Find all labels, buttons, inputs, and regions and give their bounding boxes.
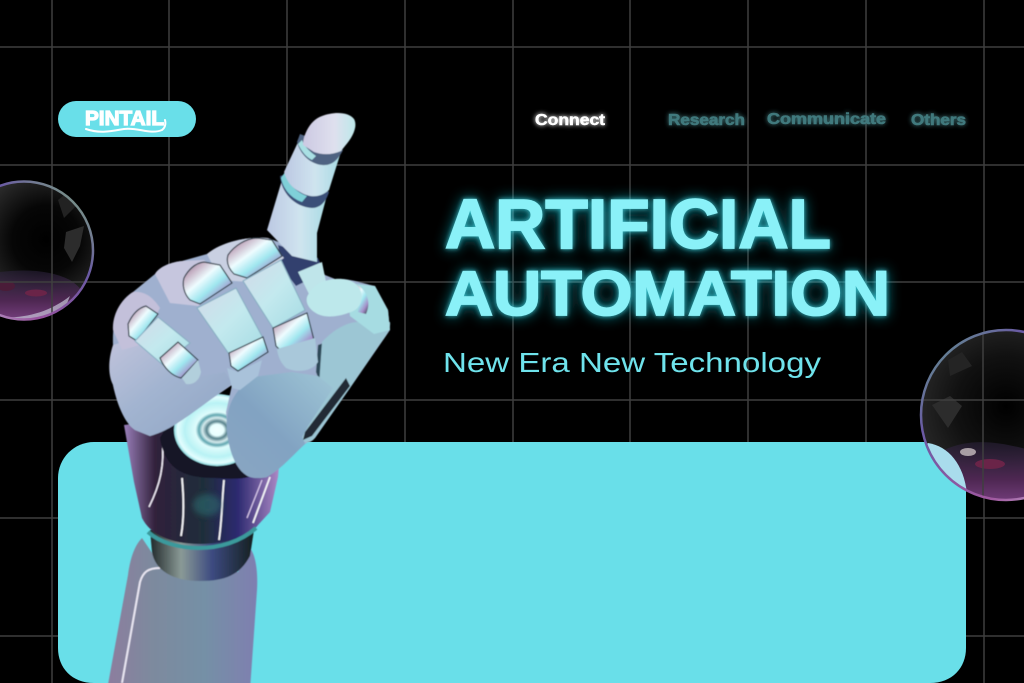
ring finger lower ring (229, 337, 268, 371)
forearm (107, 538, 257, 683)
index finger (267, 113, 355, 296)
nav item: Connect: Connect (535, 112, 605, 129)
ring finger segment (197, 288, 264, 354)
ring finger (155, 260, 268, 390)
nav item: Others: Others (911, 112, 966, 129)
middle finger shell (207, 238, 284, 282)
nav item: Communicate: Communicate (767, 111, 886, 128)
thumb (307, 279, 390, 334)
dark gap under fingers (316, 340, 340, 388)
index middle ring highlight (281, 172, 307, 202)
logo pill (58, 101, 196, 137)
little finger (113, 292, 201, 384)
little finger lower ring (160, 342, 198, 378)
left palm shell (109, 340, 232, 436)
headline (445, 185, 890, 329)
robot hand illustration (107, 113, 390, 683)
index tip ring highlight (298, 140, 316, 160)
headline line 2: AUTOMATION (445, 259, 890, 329)
cyan content panel (58, 442, 966, 683)
ring finger shell (155, 260, 232, 306)
navigation (535, 111, 966, 129)
little finger shell (113, 292, 160, 350)
glowing reactor disc (174, 394, 260, 466)
panel bottom mask (58, 648, 966, 683)
little finger knuckle ring (128, 306, 158, 341)
pink reflection (0, 270, 80, 318)
logo wave (86, 120, 165, 132)
bubble left (0, 180, 94, 321)
headline line 1: ARTIFICIAL (445, 185, 831, 263)
bubble right (920, 328, 1024, 502)
index middle ring (280, 170, 329, 208)
index lower segment (267, 180, 327, 262)
index fingertip (303, 113, 355, 154)
forearm light strip (122, 568, 160, 683)
middle finger (207, 238, 318, 371)
logo wordmark: PINTAIL (85, 108, 164, 130)
middle finger tip (277, 338, 318, 371)
nav item: Research: Research (668, 112, 745, 129)
wrist glass joint (124, 415, 282, 548)
hand base silhouette (113, 238, 390, 478)
pink reflection (945, 442, 1024, 499)
middle finger lower ring (273, 313, 314, 352)
middle finger segment (243, 260, 305, 328)
ring finger tip (227, 360, 262, 390)
refracted panel corner (927, 443, 966, 489)
index middle segment (284, 140, 340, 196)
wrist collar (150, 530, 254, 581)
dark core housing (160, 395, 262, 479)
subtitle: New Era New Technology (443, 347, 821, 378)
thumb base shell (302, 322, 390, 442)
little finger segment (135, 317, 190, 365)
middle finger knuckle ring (227, 238, 282, 278)
ring finger knuckle ring (183, 262, 232, 304)
index base joint (278, 245, 324, 286)
right palm shell (227, 372, 333, 478)
index tip ring (297, 134, 343, 165)
little finger tip (182, 360, 201, 384)
index base cuff (298, 262, 326, 296)
slit on thumb base (303, 378, 350, 440)
